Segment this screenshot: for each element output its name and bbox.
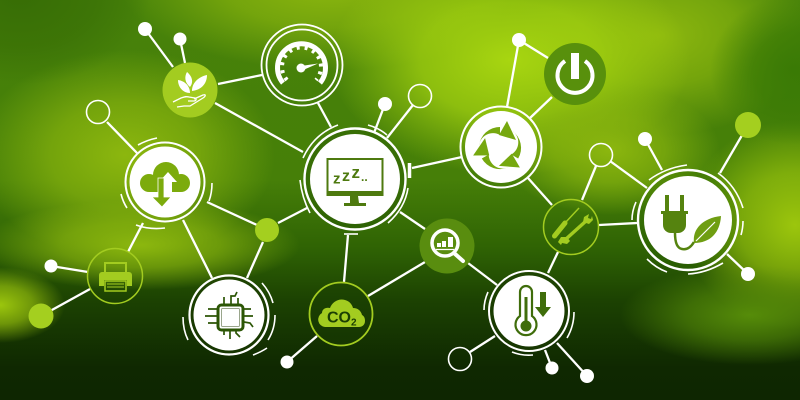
- icon: chip: [183, 276, 275, 355]
- icon: printer: [88, 248, 142, 304]
- icon: eco plug: [632, 165, 743, 274]
- icon: power button: [544, 43, 606, 105]
- sleep label: z: [352, 163, 360, 182]
- CO2 label: CO: [327, 310, 351, 326]
- icon: speedometer: [262, 24, 342, 106]
- sleep label: z: [333, 170, 340, 188]
- CO2 label: 2: [351, 318, 357, 328]
- icon: cloud up down: [121, 138, 212, 229]
- connector lines: [41, 29, 748, 376]
- outlined nodes: [86, 84, 612, 370]
- icon: tools: [544, 200, 598, 254]
- icon: plant in hand: [162, 62, 218, 118]
- icon: magnifying glass chart: [420, 218, 474, 274]
- icon: sleeping monitor: [300, 125, 410, 234]
- lime nodes: [28, 112, 761, 328]
- icon: recycle: [460, 106, 542, 188]
- sleep label: z: [342, 168, 350, 185]
- sleep label: ..: [361, 170, 368, 184]
- icon: thermometer: [484, 271, 574, 355]
- icon: CO2 cloud: [310, 282, 372, 346]
